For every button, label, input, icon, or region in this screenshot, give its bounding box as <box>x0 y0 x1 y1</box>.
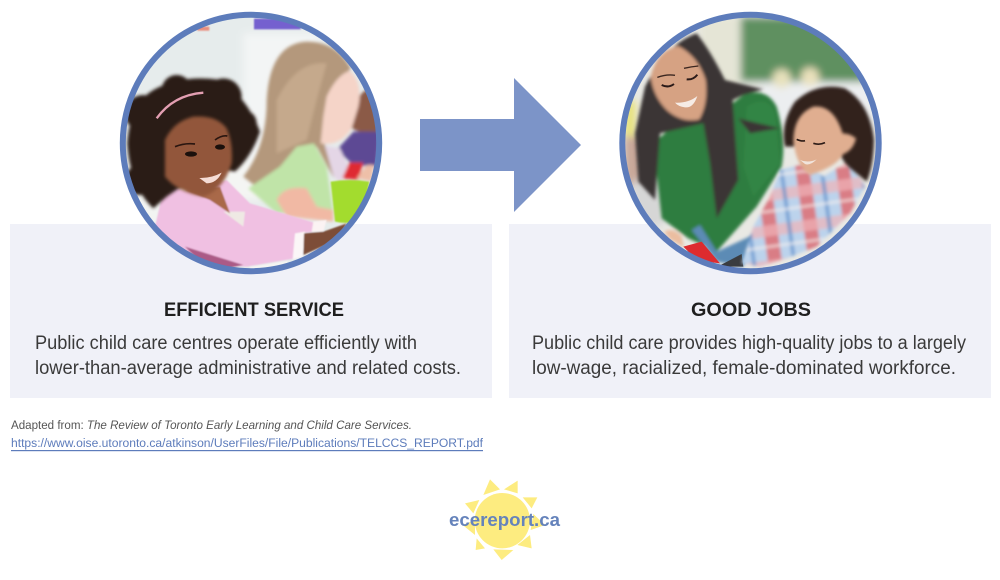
background child <box>350 89 376 134</box>
teacher's hand <box>664 230 684 247</box>
blond child hair <box>243 42 351 188</box>
girl's hair <box>125 75 260 208</box>
green sweater <box>653 93 783 252</box>
jeans <box>692 225 757 267</box>
child's eyes and smile <box>797 139 825 164</box>
text block: good jobs description: low-wage, racialized, female-dominated workforce. <box>532 358 956 379</box>
red toy and hand <box>342 163 363 180</box>
text block: efficient service description: Public child care centres operate efficiently with <box>35 333 417 354</box>
red toy <box>683 242 720 263</box>
text block: good jobs description: Public child care provides high-quality jobs to a largely <box>532 333 966 354</box>
logo: ecereport.ca sun: ecereport.ca <box>449 509 561 530</box>
photo: teacher and child playing <box>625 18 876 268</box>
text block: efficient service description <box>35 333 461 379</box>
photo: right circle border <box>622 15 879 271</box>
source note: https://www.oise.utoronto.ca/atkinson/UserFiles/File/Publications/TELCCS_REPORT.pdf <box>11 436 484 450</box>
blond child face <box>321 71 360 144</box>
photo: left circle border <box>123 15 379 271</box>
headband, eyes and smile <box>157 93 227 183</box>
teacher's hair <box>635 33 763 218</box>
panel: good jobs <box>509 224 991 398</box>
teacher's smile and eyes <box>657 66 698 107</box>
girl's face <box>165 116 232 197</box>
child's hair <box>784 87 874 182</box>
photo: girl with curly hair at table <box>126 18 376 268</box>
logo: ecereport.ca sun <box>449 479 561 560</box>
neck <box>185 187 230 213</box>
source note <box>11 418 484 451</box>
girl's pink sleeve and top <box>155 180 347 272</box>
panel: efficient service <box>10 224 492 398</box>
child's plaid shirt <box>742 160 865 267</box>
arrow <box>420 78 581 212</box>
heading: efficient service: EFFICIENT SERVICE <box>164 300 344 321</box>
child's face <box>793 106 856 175</box>
green cup <box>331 180 369 223</box>
heading: good jobs: GOOD JOBS <box>691 300 811 321</box>
text block: good jobs description <box>532 333 966 379</box>
teacher's face <box>651 46 706 120</box>
green shirt <box>248 143 333 213</box>
text block: efficient service description: lower-than-average administrative and related costs. <box>35 358 461 379</box>
source note: Adapted from: The Review of Toronto Early Learning and Child Care Services. <box>11 418 412 432</box>
